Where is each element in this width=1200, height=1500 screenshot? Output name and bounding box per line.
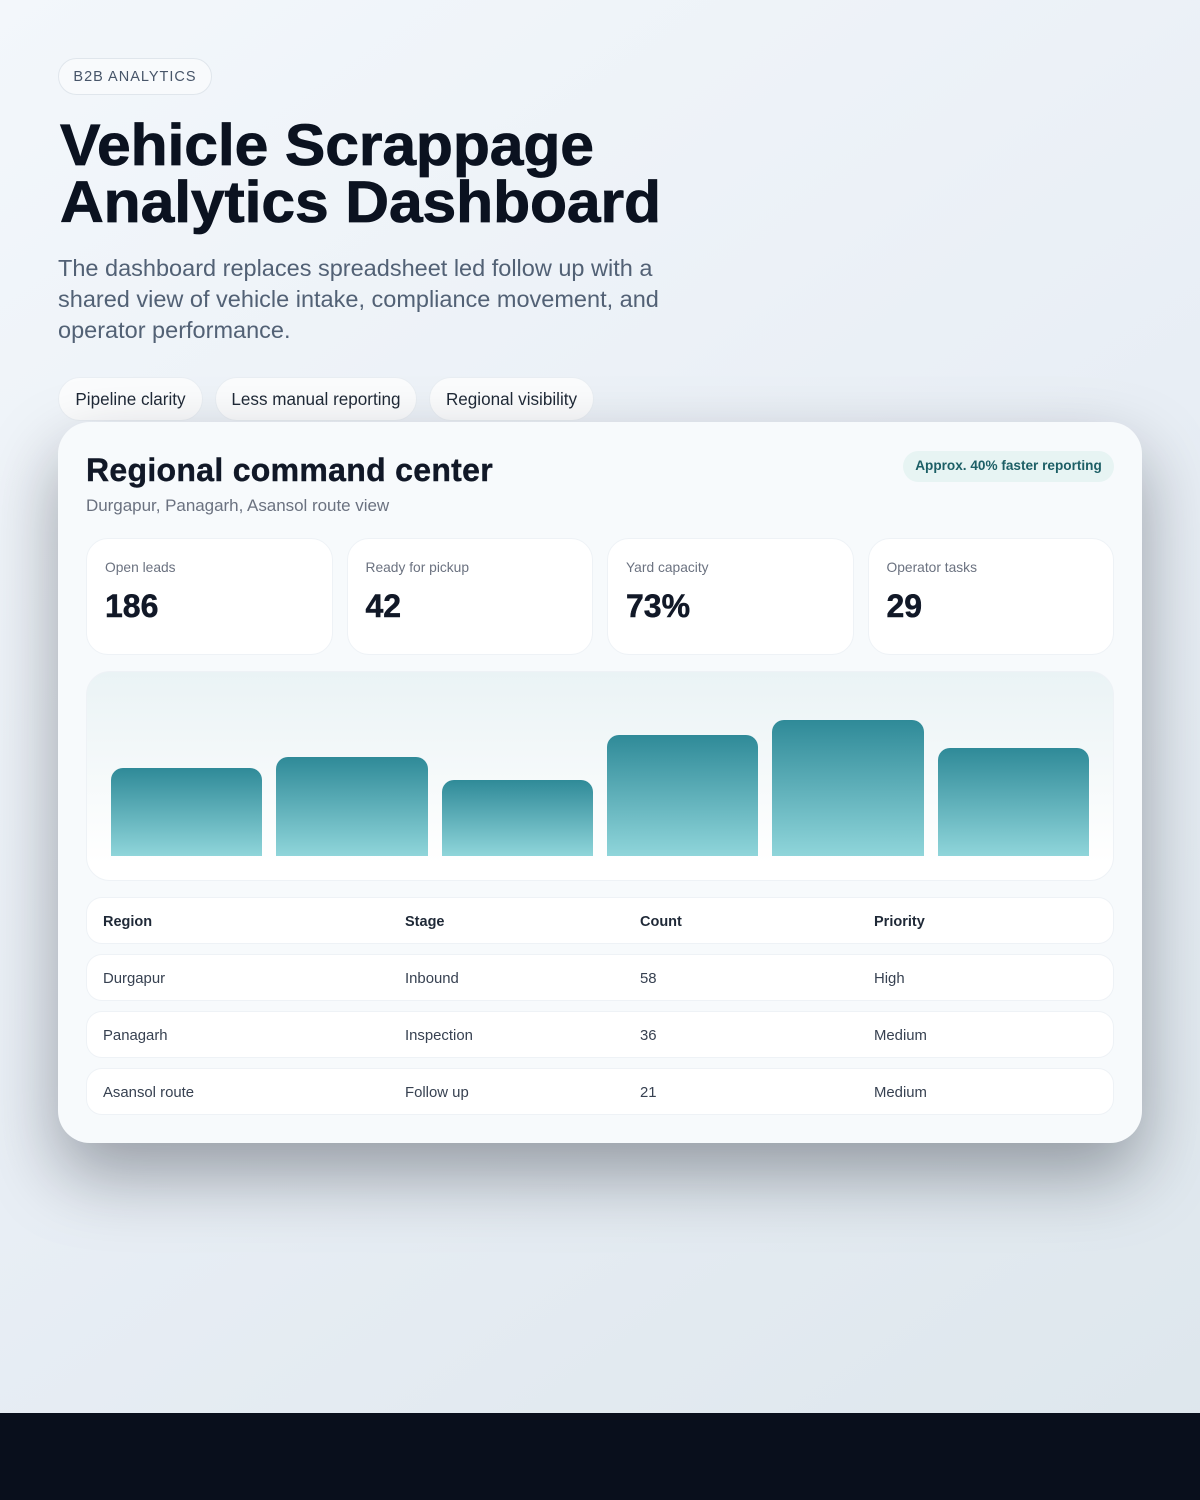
pill: less manual reporting	[215, 377, 417, 421]
pill: regional visibility	[429, 377, 594, 421]
table header row: Count	[640, 914, 682, 930]
table header row: Region	[103, 914, 152, 930]
card: ready for pickup: Ready for pickup	[366, 560, 469, 575]
card: operator tasks: 29	[886, 588, 922, 624]
panel: regional command center	[58, 422, 1142, 1143]
row: Asansol route: Asansol route	[103, 1085, 194, 1101]
bar 3	[442, 780, 593, 856]
metric cards	[86, 538, 1114, 655]
card: ready for pickup: 42	[366, 588, 401, 624]
title	[60, 113, 661, 235]
footer band	[0, 1413, 1200, 1500]
pill: pipeline clarity	[58, 377, 203, 421]
row: Panagarh: Medium	[874, 1028, 927, 1044]
category tag: B2B ANALYTICS	[73, 69, 197, 85]
card: operator tasks: Operator tasks	[886, 560, 977, 575]
card: yard capacity: 73%	[626, 588, 690, 624]
row: Panagarh	[86, 1011, 1114, 1058]
row: Durgapur: High	[874, 971, 905, 987]
card: ready for pickup	[346, 538, 593, 655]
table header row: Priority	[874, 914, 925, 930]
bar 5	[772, 720, 924, 856]
panel subheading: Durgapur, Panagarh, Asansol route view	[86, 496, 389, 515]
table header row	[86, 897, 1114, 944]
row: Durgapur	[86, 954, 1114, 1001]
pill: regional visibility: Regional visibility	[446, 390, 577, 409]
row: Durgapur: Durgapur	[103, 971, 165, 987]
row: Asansol route: 21	[640, 1085, 657, 1101]
card: open leads	[86, 538, 332, 655]
bar 2	[276, 757, 428, 856]
card: yard capacity	[607, 538, 854, 655]
table	[86, 897, 1114, 1115]
bar 1	[111, 768, 262, 856]
card: operator tasks	[868, 538, 1114, 655]
row: Panagarh: 36	[640, 1028, 657, 1044]
row: Durgapur: 58	[640, 971, 657, 987]
row: Asansol route	[86, 1068, 1114, 1115]
title: Analytics Dashboard	[60, 170, 661, 235]
benefit pills	[59, 378, 593, 420]
subtitle: shared view of vehicle intake, compliance movement, and	[58, 286, 659, 312]
pill: pipeline clarity: Pipeline clarity	[75, 390, 186, 409]
card: yard capacity: Yard capacity	[626, 560, 709, 575]
table header row: Stage	[405, 914, 444, 930]
title: Vehicle Scrappage	[60, 113, 594, 178]
row: Panagarh: Inspection	[405, 1028, 473, 1044]
card: open leads: Open leads	[105, 560, 176, 575]
card: open leads: 186	[105, 588, 158, 624]
subtitle: operator performance.	[58, 317, 291, 343]
row: Asansol route: Follow up	[405, 1085, 469, 1101]
category tag	[58, 58, 212, 95]
panel heading: Regional command center	[86, 452, 493, 488]
bar 4	[607, 735, 758, 856]
reporting badge: Approx. 40% faster reporting	[915, 458, 1102, 473]
subtitle: The dashboard replaces spreadsheet led follow up with a	[58, 255, 652, 281]
bar 6	[938, 748, 1089, 856]
row: Asansol route: Medium	[874, 1085, 927, 1101]
row: Panagarh: Panagarh	[103, 1028, 168, 1044]
reporting badge	[903, 451, 1114, 482]
row: Durgapur: Inbound	[405, 971, 459, 987]
subtitle	[58, 255, 659, 343]
pill: less manual reporting: Less manual reporting	[231, 390, 401, 409]
bar chart	[86, 671, 1114, 881]
